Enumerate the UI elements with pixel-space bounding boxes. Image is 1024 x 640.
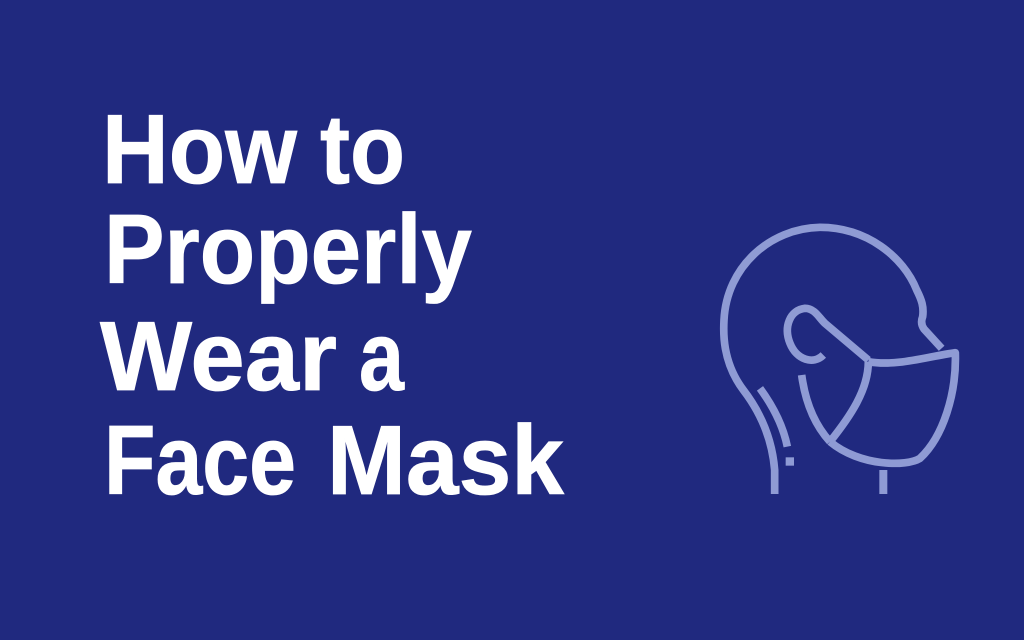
throat line bbox=[871, 470, 895, 494]
title line 4 bbox=[104, 405, 564, 515]
neck crease bbox=[760, 388, 787, 447]
head outline bbox=[724, 227, 942, 494]
title bbox=[100, 94, 564, 515]
mask centre seam bbox=[830, 362, 868, 442]
title line 4: Mask bbox=[327, 405, 564, 515]
title line 1: to bbox=[320, 94, 405, 204]
mask outline bbox=[830, 353, 955, 463]
icon: head in profile wearing a face mask bbox=[724, 227, 955, 494]
lower strap bbox=[802, 375, 830, 442]
title line 1 bbox=[102, 94, 405, 204]
ear and strap bbox=[787, 308, 868, 360]
neck dot bbox=[786, 457, 794, 466]
title line 4: Face bbox=[104, 405, 296, 515]
title line 1: How bbox=[102, 94, 298, 204]
title line 3: Wear bbox=[100, 301, 337, 411]
title line 2: Properly bbox=[104, 194, 472, 304]
title line 3: a bbox=[359, 301, 405, 411]
